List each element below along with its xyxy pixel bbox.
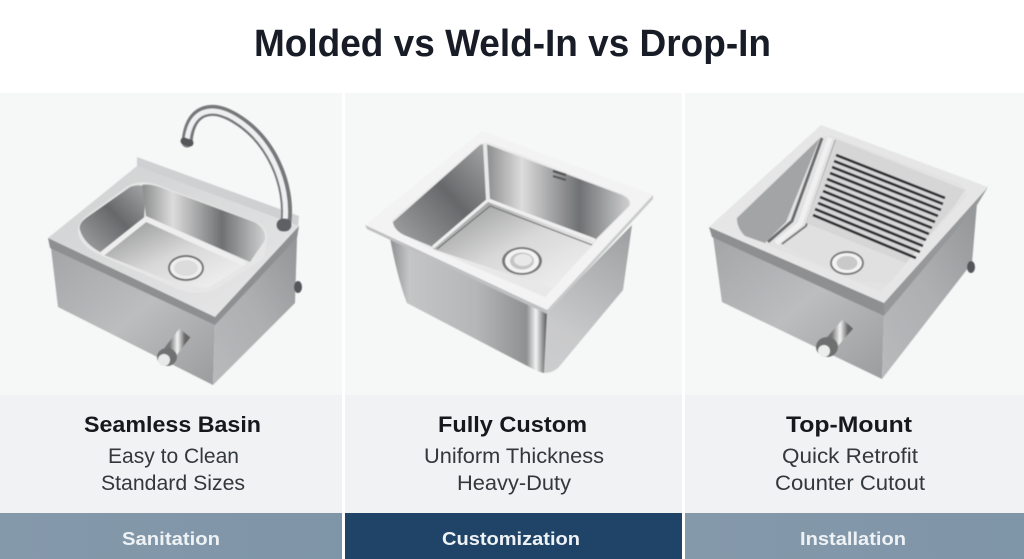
drain: [168, 255, 204, 281]
heading: seamless basin: Seamless Basin: [84, 412, 261, 437]
drain: [502, 247, 542, 275]
heading: fully custom: Fully Custom: [438, 412, 587, 437]
panel: drop-in sink: [685, 93, 1024, 559]
bottom bar: customization: [345, 513, 682, 559]
overflow slot: [553, 171, 566, 180]
bottom bar: sanitation: [0, 513, 342, 559]
sink illustration: top-mount with washboard: [709, 125, 988, 379]
bottom bar: sanitation: Sanitation: [122, 528, 220, 549]
features: uniform thickness: Uniform Thickness: [424, 445, 604, 468]
features: counter cutout: Counter Cutout: [775, 472, 925, 495]
bottom bar: installation: Installation: [800, 528, 906, 549]
bottom bar: customization: Customization: [442, 528, 580, 549]
knee valve: [816, 324, 848, 357]
side knob: [294, 281, 302, 293]
bottom bar: installation: [685, 513, 1024, 559]
panel: weld-in sink: [345, 93, 682, 559]
sink illustration: seamless basin with faucet: [48, 110, 302, 385]
drain: [830, 251, 864, 275]
sink illustration: fully custom deep basin: [365, 131, 653, 373]
panel: molded sink: [0, 93, 342, 559]
features: standard sizes: Standard Sizes: [101, 472, 245, 495]
features: heavy-duty: Heavy-Duty: [457, 472, 572, 495]
title: Molded vs Weld-In vs Drop-In: [254, 23, 771, 65]
heading: top-mount: Top-Mount: [786, 412, 913, 437]
features: quick retrofit: Quick Retrofit: [782, 445, 918, 468]
knee valve: [157, 333, 185, 366]
washboard ridges: [806, 139, 965, 263]
features: easy to clean: Easy to Clean: [108, 445, 239, 468]
faucet: [184, 110, 287, 225]
side knob: [967, 261, 975, 273]
